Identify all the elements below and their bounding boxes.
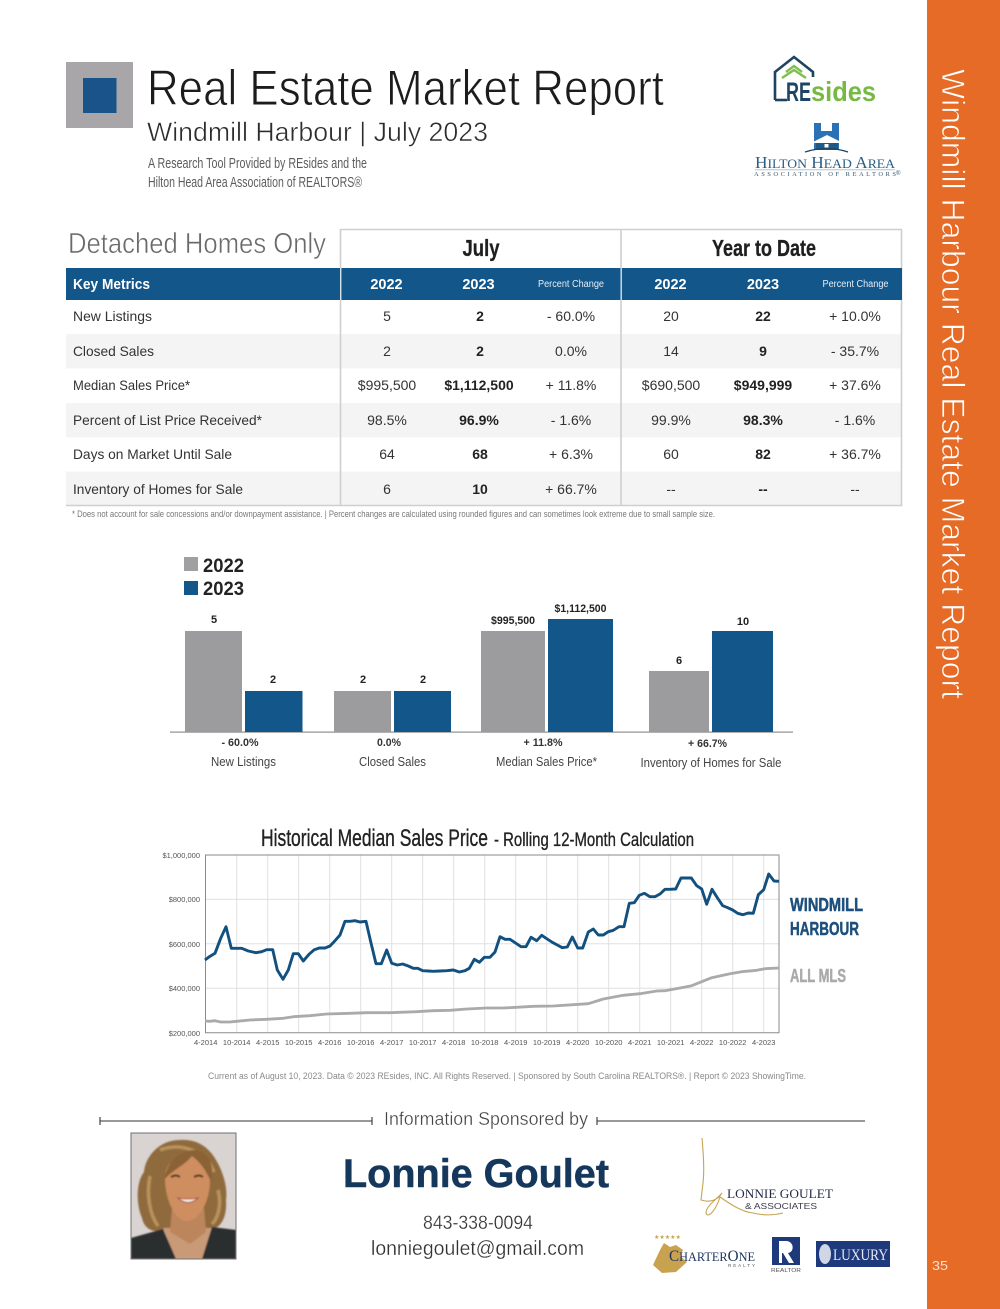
title block — [147, 60, 664, 191]
table frame — [66, 230, 902, 506]
row: Days on Market Until Sale: 60 — [663, 446, 679, 462]
y axis labels: $400,000 — [169, 984, 200, 993]
header row: Percent Change — [822, 279, 889, 290]
logo: CharterOne Realty — [653, 1234, 755, 1273]
bars: Closed Sales: 2 — [420, 674, 426, 686]
heading: Detached Homes Only: Detached Homes Only — [68, 228, 326, 260]
row: Percent of List Price Received: Percent of List Price Received* — [73, 412, 263, 428]
row: Days on Market Until Sale: 64 — [379, 446, 395, 462]
period header: July: July — [462, 235, 500, 261]
x axis labels: 10-2020 — [595, 1038, 622, 1047]
footnote: * Does not account for sale concessions and/or downpayment assistance. | Percent changes are calculated using rounded figures and can sometimes look extreme due to small sample size. — [72, 509, 715, 519]
eyes — [171, 1176, 203, 1177]
row: Median Sales Price: $995,500 — [358, 377, 416, 393]
icon: header square — [66, 62, 133, 128]
bars: Median Sales Price: $1,112,500 — [554, 603, 606, 615]
logo: Lonnie Goulet and Associates — [701, 1138, 833, 1215]
row: New Listings: New Listings — [73, 308, 152, 324]
legend — [184, 556, 244, 600]
legend: 2022 — [203, 556, 244, 577]
research tool note: A Research Tool Provided by REsides and the — [148, 155, 367, 172]
x axis labels: 4-2015 — [256, 1038, 279, 1047]
header row: Key Metrics — [73, 277, 150, 293]
row: Days on Market Until Sale: 68 — [472, 446, 488, 462]
row: Closed Sales: 2 — [383, 343, 391, 359]
row: Percent of List Price Received: - 1.6% — [551, 412, 591, 428]
header row: 2023 — [747, 277, 779, 293]
series: Windmill Harbour — [205, 874, 779, 979]
logo: Hilton Head Area Association of Realtors — [754, 123, 901, 178]
bars: Closed Sales — [334, 674, 451, 769]
y axis labels — [162, 851, 200, 1038]
x axis labels: 10-2017 — [409, 1038, 436, 1047]
row: Inventory of Homes for Sale: 6 — [383, 481, 391, 497]
header row: 2022 — [370, 277, 403, 293]
row: Inventory of Homes for Sale: 10 — [472, 481, 488, 497]
bars: New Listings: - 60.0% — [222, 737, 259, 749]
row: Inventory of Homes for Sale: -- — [850, 481, 860, 497]
row: Median Sales Price — [73, 377, 881, 393]
x axis labels: 10-2016 — [347, 1038, 374, 1047]
logo: Hilton Head Area Association of Realtors: ® — [896, 170, 901, 177]
bars: Closed Sales: Closed Sales — [359, 755, 426, 769]
y axis labels: $1,000,000 — [162, 851, 200, 860]
bars: Inventory of Homes for Sale — [640, 616, 782, 770]
logo: CharterOne Realty: CHARTERONE — [669, 1248, 755, 1265]
row: Percent of List Price Received: 98.5% — [367, 412, 407, 428]
row: Inventory of Homes for Sale — [73, 481, 860, 497]
row: Median Sales Price: + 37.6% — [829, 377, 881, 393]
main title: Real Estate Market Report — [147, 60, 664, 116]
sponsor divider: Information Sponsored by — [384, 1109, 588, 1129]
dark top — [131, 1227, 236, 1259]
logo: Luxury Real Estate: LUXURY — [833, 1247, 888, 1264]
subtitle: Windmill Harbour | July 2023 — [147, 117, 488, 147]
series label: Windmill Harbour — [790, 895, 863, 939]
sponsor phone: 843-338-0094 — [423, 1213, 533, 1234]
header row: 2023 — [462, 277, 495, 293]
row: Inventory of Homes for Sale: Inventory of Homes for Sale — [73, 481, 243, 497]
row: New Listings: 2 — [476, 308, 484, 324]
orange sidebar — [927, 0, 1000, 1309]
hair highlights — [148, 1147, 220, 1226]
smile — [178, 1198, 198, 1202]
row: Days on Market Until Sale: + 6.3% — [549, 446, 593, 462]
logo: Realtor — [771, 1237, 801, 1274]
bar chart — [170, 603, 793, 770]
sponsor divider — [100, 1109, 865, 1129]
row: Days on Market Until Sale — [73, 446, 881, 462]
row: Percent of List Price Received: 96.9% — [459, 412, 499, 428]
hair — [138, 1140, 226, 1231]
bars: New Listings: New Listings — [211, 755, 276, 769]
row: New Listings: 20 — [663, 308, 679, 324]
series: All MLS — [205, 968, 779, 1022]
logo: Lonnie Goulet and Associates: & ASSOCIATES — [745, 1201, 817, 1211]
row: New Listings: + 10.0% — [829, 308, 881, 324]
row: Percent of List Price Received: - 1.6% — [835, 412, 875, 428]
logo: REsides — [775, 57, 876, 107]
bars: Median Sales Price: $995,500 — [491, 615, 535, 627]
x axis labels: 4-2018 — [442, 1038, 465, 1047]
row: Closed Sales: Closed Sales — [73, 343, 154, 359]
x axis labels: 4-2020 — [566, 1038, 589, 1047]
logo: Luxury Real Estate — [816, 1241, 890, 1267]
sponsor name: Lonnie Goulet — [343, 1152, 609, 1196]
baseline — [170, 732, 793, 733]
row: Closed Sales — [73, 343, 879, 359]
x axis labels: 10-2022 — [719, 1038, 746, 1047]
grid lines — [206, 855, 779, 1033]
x axis labels: 10-2019 — [533, 1038, 560, 1047]
row: Median Sales Price: $949,999 — [734, 377, 792, 393]
bars: New Listings: 2 — [270, 674, 276, 686]
y axis labels: $600,000 — [169, 940, 200, 949]
metrics table — [66, 230, 902, 506]
research tool note — [148, 155, 367, 191]
series label: Windmill Harbour: WINDMILL — [790, 895, 863, 915]
legend: 2023 — [203, 579, 244, 600]
logo: CharterOne Realty: REALTY — [728, 1263, 755, 1268]
row: New Listings — [73, 308, 881, 324]
line chart: historical median sales price — [162, 851, 863, 1047]
row: Median Sales Price: $1,112,500 — [444, 377, 514, 393]
logo: CharterOne Realty: ★★★★★ — [654, 1234, 681, 1241]
x axis labels: 10-2015 — [285, 1038, 312, 1047]
row: Percent of List Price Received: 99.9% — [651, 412, 691, 428]
x axis labels: 4-2021 — [628, 1038, 651, 1047]
neck — [170, 1208, 206, 1244]
row: Days on Market Until Sale: Days on Market Until Sale — [73, 446, 232, 462]
row shading — [66, 334, 902, 506]
row: New Listings: 22 — [755, 308, 771, 324]
row: Closed Sales: 2 — [476, 343, 484, 359]
series label: Windmill Harbour: HARBOUR — [790, 919, 859, 939]
x axis labels: 4-2019 — [504, 1038, 527, 1047]
y axis labels: $200,000 — [169, 1029, 200, 1038]
bars: Median Sales Price: Median Sales Price* — [496, 755, 597, 769]
row: Median Sales Price: Median Sales Price* — [73, 377, 191, 393]
page number: 35 — [932, 1258, 948, 1273]
bars: Median Sales Price — [481, 603, 613, 769]
bars: Inventory of Homes for Sale: + 66.7% — [688, 738, 727, 750]
fringe — [164, 1150, 212, 1182]
bars: Closed Sales: 2 — [360, 674, 366, 686]
header row — [66, 268, 902, 300]
series label: All MLS: ALL MLS — [790, 966, 846, 986]
bars: Inventory of Homes for Sale: Inventory of Homes for Sale — [640, 756, 782, 770]
row: New Listings: - 60.0% — [547, 308, 595, 324]
x axis labels — [194, 1038, 775, 1047]
logo: Realtor: REALTOR — [771, 1268, 801, 1274]
x axis labels: 4-2017 — [380, 1038, 403, 1047]
chart title: - Rolling 12-Month Calculation — [494, 829, 694, 851]
row: Percent of List Price Received — [73, 412, 875, 428]
face — [165, 1156, 210, 1221]
row: New Listings: 5 — [383, 308, 391, 324]
row: Closed Sales: 14 — [663, 343, 679, 359]
bars: Inventory of Homes for Sale: 6 — [676, 655, 682, 667]
y axis labels: $800,000 — [169, 895, 200, 904]
research tool note: Hilton Head Area Association of REALTORS® — [148, 174, 362, 191]
row: Closed Sales: 9 — [759, 343, 767, 359]
x axis labels: 10-2018 — [471, 1038, 498, 1047]
row: Inventory of Homes for Sale: -- — [666, 481, 676, 497]
row: Closed Sales: - 35.7% — [831, 343, 879, 359]
x axis labels: 4-2022 — [690, 1038, 713, 1047]
x axis labels: 4-2014 — [194, 1038, 217, 1047]
row: Days on Market Until Sale: + 36.7% — [829, 446, 881, 462]
logo: Hilton Head Area Association of Realtors: ASSOCIATION OF REALTORS — [754, 171, 896, 178]
bars: Inventory of Homes for Sale: 10 — [737, 616, 749, 628]
bars: New Listings: 5 — [211, 614, 217, 626]
logo: Lonnie Goulet and Associates: LONNIE GOULET — [727, 1187, 833, 1201]
row: Inventory of Homes for Sale: + 66.7% — [545, 481, 597, 497]
header row: 2022 — [654, 277, 687, 293]
row: Closed Sales: 0.0% — [555, 343, 587, 359]
sponsor email: lonniegoulet@gmail.com — [371, 1238, 584, 1260]
logo: Hilton Head Area Association of Realtors: HILTON HEAD AREA — [755, 153, 896, 172]
plot frame — [206, 855, 779, 1033]
logo: REsides: RE — [786, 77, 811, 107]
sidebar title: Windmill Harbour Real Estate Market Report — [935, 69, 971, 699]
row: Days on Market Until Sale: 82 — [755, 446, 771, 462]
logo: REsides: sides — [811, 76, 876, 107]
portrait photo — [131, 1133, 236, 1259]
row: Median Sales Price: + 11.8% — [546, 377, 596, 393]
chart title: Historical Median Sales Price — [261, 825, 488, 852]
chest — [163, 1228, 212, 1259]
bars: Closed Sales: 0.0% — [377, 737, 401, 749]
period header: Year to Date: Year to Date — [712, 235, 816, 261]
x axis labels: 10-2014 — [223, 1038, 250, 1047]
x axis labels: 4-2016 — [318, 1038, 341, 1047]
row: Inventory of Homes for Sale: -- — [758, 481, 768, 497]
source note: Current as of August 10, 2023. Data © 2023 REsides, INC. All Rights Reserved. | Sponsored by South Carolina REALTORS®. | Report © 2023 ShowingTime. — [208, 1071, 806, 1081]
x axis labels: 4-2023 — [752, 1038, 775, 1047]
header row: Percent Change — [538, 279, 604, 290]
row: Percent of List Price Received: 98.3% — [743, 412, 783, 428]
bars: New Listings — [185, 614, 302, 769]
bars: Median Sales Price: + 11.8% — [524, 737, 563, 749]
row: Median Sales Price: $690,500 — [642, 377, 700, 393]
x axis labels: 10-2021 — [657, 1038, 684, 1047]
